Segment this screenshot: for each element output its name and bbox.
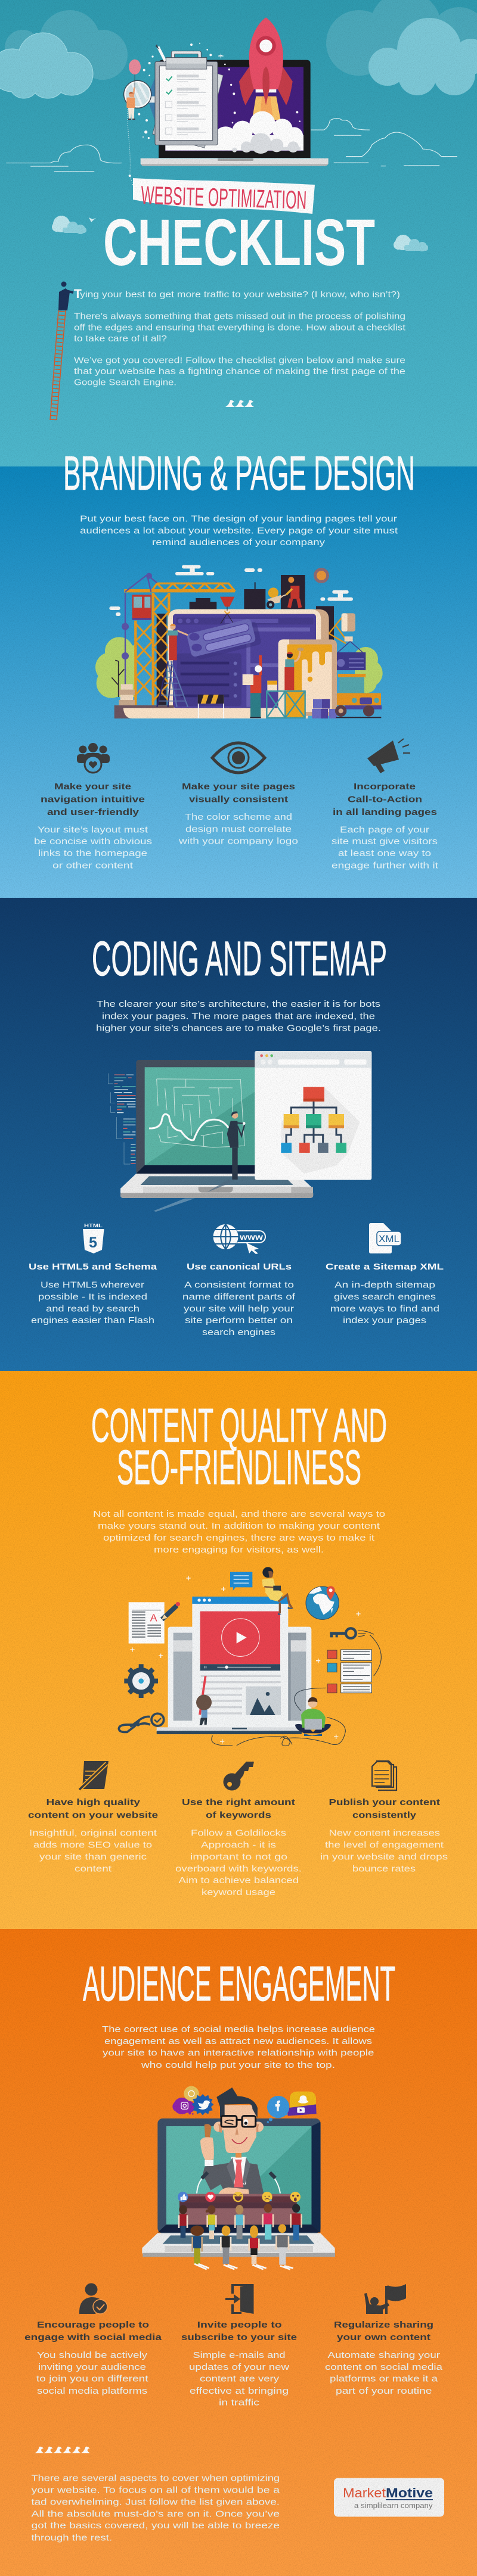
column: keywords: keyword usage <box>202 1887 275 1897</box>
logo: MarketMotive: Market <box>343 2485 386 2500</box>
intro text: ying your best to get more traffic to your website? (I know, who isn’t?) <box>80 290 400 300</box>
column: consistency: Make your site pages <box>182 782 295 792</box>
audience back row <box>179 2204 302 2241</box>
intro text <box>80 514 398 547</box>
column: high quality content: your site than generic <box>39 1852 147 1862</box>
column: call to action: site must give visitors <box>332 836 438 847</box>
icon: key <box>223 1762 254 1791</box>
article sheet and pencil <box>129 1602 180 1644</box>
intro text <box>102 2024 375 2070</box>
column: call to action: Call-to-Action <box>348 795 422 804</box>
intro text: off the edges and ensuring that everything is done. How about a checklist <box>74 323 406 332</box>
laptop <box>114 609 329 718</box>
intro text: that your website has a fighting chance of making the first page of the <box>74 366 405 377</box>
column: consistency <box>178 743 298 846</box>
column: sitemap XML <box>326 1223 444 1326</box>
icon: megaphone <box>367 739 410 773</box>
icon: html5 shield: HTML <box>84 1222 103 1228</box>
title banner: WEBSITE OPTIMIZATION <box>141 181 307 215</box>
pluses <box>130 1576 361 1744</box>
column: regular sharing: content on social media <box>325 2362 443 2372</box>
title banner <box>133 178 315 215</box>
intro text: The correct use of social media helps increase audience <box>102 2024 375 2034</box>
sky details <box>109 565 353 616</box>
column: call to action: in all landing pages <box>333 807 437 817</box>
man with laptop <box>212 1688 345 1746</box>
column: navigation: navigation intuitive <box>41 795 145 804</box>
column: HTML5: Use HTML5 and Schema <box>29 1262 157 1272</box>
column: navigation: or other content <box>52 860 134 871</box>
column: consistency: visually consistent <box>189 795 288 804</box>
title: checklist: CHECKLIST <box>103 206 375 279</box>
child with pencil <box>196 1676 212 1725</box>
column: publish consistently: New content increases <box>329 1828 440 1838</box>
column: publish consistently: the level of engagement <box>325 1840 444 1850</box>
column: call to action: Incorporate <box>354 782 416 792</box>
trees <box>95 637 383 698</box>
column: navigation: links to the homepage <box>38 848 147 858</box>
intro text: T <box>74 287 82 301</box>
column: HTML5: and read by search <box>46 1303 140 1314</box>
icon: man on ladder <box>50 281 73 420</box>
icon: door with arrow <box>225 2284 254 2314</box>
closing text: All the absolute must-do’s are on it. Once you’ve <box>31 2509 280 2519</box>
icon: outline clouds <box>6 119 457 172</box>
rocket <box>239 17 293 105</box>
column: keywords: Approach - it is <box>201 1840 276 1850</box>
crane <box>124 575 235 705</box>
illustration: presenter on laptop with audience <box>142 2086 335 2269</box>
social bubbles <box>172 2086 317 2123</box>
column: sitemap XML: gives search engines <box>334 1292 436 1302</box>
heading <box>91 1399 387 1495</box>
column: high quality content: adds more SEO value to <box>33 1840 152 1850</box>
logo: MarketMotive: Motive <box>386 2485 433 2500</box>
man <box>207 1112 246 1193</box>
column: publish consistently: consistently <box>352 1810 417 1820</box>
column: sitemap XML: An in-depth sitemap <box>334 1280 435 1290</box>
column: social media: inviting your audience <box>38 2362 146 2372</box>
icon: waves divider <box>225 400 254 407</box>
intro text: The clearer your site’s architecture, the easier it is for bots <box>97 999 380 1009</box>
icon: XML file <box>369 1223 401 1253</box>
illustration: laptop, sitemap browser and man drawing a maze <box>108 1051 371 1212</box>
closing text: your website. To focus on all of them would be a <box>31 2485 280 2496</box>
column: regular sharing: your own content <box>337 2332 430 2342</box>
intro text: There’s always something that gets missed out in the process of polishing <box>74 311 405 322</box>
column: HTML5 <box>29 1222 157 1326</box>
column: keywords: of keywords <box>206 1810 271 1820</box>
column: subscribe <box>181 2284 297 2408</box>
column: HTML5: Use HTML5 wherever <box>41 1280 144 1290</box>
maze drawing <box>149 1079 244 1147</box>
column: consistency: The color scheme and <box>185 812 292 822</box>
icon: waves divider <box>35 2447 91 2453</box>
logo: MarketMotive <box>334 2478 444 2516</box>
illustration: content website with people and icons <box>119 1567 381 1746</box>
column: subscribe: effective at bringing <box>190 2386 289 2396</box>
device <box>157 1597 311 1734</box>
column: regular sharing: platforms or make it a <box>330 2374 438 2384</box>
column: call to action: Each page of your <box>340 825 429 835</box>
column: high quality content: Have high quality <box>47 1797 141 1807</box>
column: call to action: engage further with it <box>332 860 439 871</box>
column: canonical URLs: site perform better on <box>185 1315 293 1326</box>
article lines and picture <box>201 1675 281 1715</box>
illustration: website under construction <box>95 565 383 718</box>
right crane, panel and truck <box>329 613 382 718</box>
icon: right clouds <box>326 0 477 95</box>
column: call to action: at least one way to <box>338 848 431 858</box>
column: publish consistently <box>320 1761 448 1874</box>
chat bubble <box>230 1572 252 1591</box>
column: subscribe: Invite people to <box>197 2320 282 2330</box>
column: sitemap XML: Create a Sitemap XML <box>326 1262 444 1272</box>
flames <box>252 97 281 120</box>
column: social media: Encourage people to <box>37 2320 149 2330</box>
laptop <box>142 2118 335 2257</box>
column: subscribe: updates of your new <box>189 2362 289 2372</box>
column: navigation: and user-friendly <box>47 807 140 817</box>
reactions <box>178 2192 301 2202</box>
closing text: got the basics covered, you will be able to breeze <box>31 2521 280 2531</box>
closing text <box>31 2474 280 2543</box>
column: keywords: Follow a Goldilocks <box>191 1828 286 1838</box>
column: subscribe: content are very <box>200 2374 280 2384</box>
column: high quality content: content on your website <box>28 1810 158 1820</box>
sparkles <box>138 43 301 139</box>
laptop <box>120 1060 313 1212</box>
skyline <box>157 575 334 705</box>
column: canonical URLs: Use canonical URLs <box>187 1262 292 1272</box>
column: keywords <box>175 1762 302 1897</box>
article sheet and pencil: A <box>150 1612 157 1624</box>
intro text: optimized for search engines, there are ways to make it <box>103 1533 375 1543</box>
column: navigation: Your site’s layout must <box>38 825 148 835</box>
column: navigation: Make your site <box>54 782 131 792</box>
column: regular sharing: Automate sharing your <box>328 2350 440 2360</box>
woman sitting on browser <box>262 1567 294 1615</box>
column: keywords: important to not go <box>190 1852 287 1862</box>
illustration: rocket launching from laptop with checklist <box>124 17 329 191</box>
column: canonical URLs: name different parts of <box>182 1292 296 1302</box>
panel: intro <box>0 0 477 466</box>
column: navigation <box>34 743 152 871</box>
video player <box>200 1611 280 1670</box>
laptop <box>141 60 329 166</box>
column: consistency: with your company logo <box>178 836 298 846</box>
panel: branding and page design <box>0 447 477 898</box>
intro text: index your pages. The more pages that are indexed, the <box>102 1012 375 1021</box>
stone blocks <box>119 684 135 705</box>
closing text: through the rest. <box>31 2533 112 2543</box>
key and keyword lists <box>327 1628 381 1693</box>
intro text: who could help put your site to the top. <box>141 2060 335 2070</box>
intro text: to take care of it all? <box>74 334 167 344</box>
column: social media: You should be actively <box>37 2350 148 2360</box>
column: keywords: Use the right amount <box>182 1797 295 1807</box>
icon: left clouds <box>0 10 128 98</box>
column: subscribe: Simple e-mails and <box>193 2350 285 2360</box>
icon: globe with www <box>213 1224 265 1254</box>
clipboard <box>153 44 223 148</box>
balloon, magnifier and climber <box>124 60 156 122</box>
intro text: Not all content is made equal, and there are several ways to <box>93 1509 385 1519</box>
column: keywords: overboard with keywords. <box>175 1864 302 1874</box>
panel: coding and sitemap <box>0 898 477 1371</box>
column: navigation: be concise with obvious <box>34 836 152 847</box>
column: social media <box>24 2283 162 2396</box>
globe with map pin <box>306 1586 339 1619</box>
panel: audience engagement <box>0 1929 477 2576</box>
icon: small clouds and bird <box>52 216 428 251</box>
icon: XML file: XML <box>379 1233 399 1245</box>
intro text: engagement as well as attract new audiences. It allows <box>104 2036 372 2046</box>
presenter <box>197 2087 280 2201</box>
column: publish consistently: bounce rates <box>352 1864 416 1874</box>
code lines <box>108 1074 135 1164</box>
icon: html5 shield <box>83 1222 104 1253</box>
column: publish consistently: Publish your content <box>329 1797 440 1807</box>
column: consistency: design must correlate <box>185 825 292 834</box>
tablet with paint <box>267 639 337 718</box>
browser with sitemap <box>255 1051 371 1180</box>
intro text: more engaging for visitors, as well. <box>154 1545 324 1555</box>
column: keywords: Aim to achieve balanced <box>179 1875 299 1886</box>
column: sitemap XML: index your pages <box>343 1315 426 1326</box>
icon: pen on page <box>79 1761 109 1790</box>
icon: person with check <box>79 2283 107 2314</box>
column: canonical URLs: search engines <box>202 1327 275 1337</box>
column: sitemap XML: more ways to find and <box>330 1303 439 1314</box>
workers and ladder <box>157 577 300 718</box>
closing text: There are several aspects to cover when optimizing <box>31 2474 280 2483</box>
intro text: higher your site’s chances are to make Google’s first page. <box>96 1023 381 1033</box>
intro text: make yours stand out. In addition to making your content <box>98 1521 380 1531</box>
hanging panel <box>187 597 262 660</box>
column: regular sharing: Regularize sharing <box>334 2320 433 2330</box>
column: HTML5: possible - It is indexed <box>38 1292 147 1302</box>
column: call to action <box>332 739 439 871</box>
column: subscribe: subscribe to your site <box>181 2332 297 2342</box>
icon: globe with www: www <box>239 1233 264 1242</box>
intro text: Put your best face on. The design of your landing pages tell your <box>80 514 397 524</box>
column: subscribe: in traffic <box>219 2397 260 2408</box>
column: canonical URLs: A consistent format to <box>184 1280 294 1290</box>
icon: users with heart <box>77 743 110 773</box>
icon: stacked documents <box>372 1761 397 1790</box>
column: social media: to join you on different <box>36 2374 149 2384</box>
intro text: Google Search Engine. <box>74 378 176 387</box>
column: social media: engage with social media <box>24 2332 162 2342</box>
column: regular sharing <box>325 2284 443 2396</box>
intro text: audiences a lot about your website. Every page of your site must <box>80 525 398 536</box>
column: HTML5: engines easier than Flash <box>31 1315 154 1326</box>
column: high quality content: Insightful, original content <box>29 1828 157 1838</box>
column: canonical URLs: your site will help your <box>184 1303 294 1314</box>
icon: html5 shield: 5 <box>89 1234 97 1251</box>
column: regular sharing: part of your routine <box>336 2386 432 2396</box>
logo: MarketMotive: a simplilearn company <box>354 2502 433 2510</box>
column: social media: social media platforms <box>37 2386 147 2396</box>
dotted string <box>128 109 135 191</box>
icon: person with flag <box>364 2284 406 2314</box>
intro text: We’ve got you covered! Follow the checklist given below and make sure <box>74 355 405 366</box>
column: canonical URLs <box>182 1224 296 1337</box>
chain link with check <box>119 1713 164 1732</box>
column: high quality content <box>28 1761 158 1874</box>
column: publish consistently: in your website and drops <box>320 1852 448 1862</box>
closing text: tad overwhelming. Just follow the list given above. <box>31 2497 280 2507</box>
column: high quality content: content <box>75 1864 112 1874</box>
podium <box>179 2194 297 2225</box>
intro text <box>96 999 381 1033</box>
intro text: remind audiences of your company <box>152 537 326 547</box>
gear <box>124 1664 158 1698</box>
panel: content quality and SEO-friendliness <box>0 1371 477 1929</box>
intro text: your site to have an interactive relationship with people <box>103 2048 374 2058</box>
icon: eye <box>212 743 265 773</box>
intro text <box>93 1509 385 1555</box>
audience front row <box>190 2224 293 2269</box>
intro text <box>74 287 406 387</box>
smoke <box>165 111 303 154</box>
